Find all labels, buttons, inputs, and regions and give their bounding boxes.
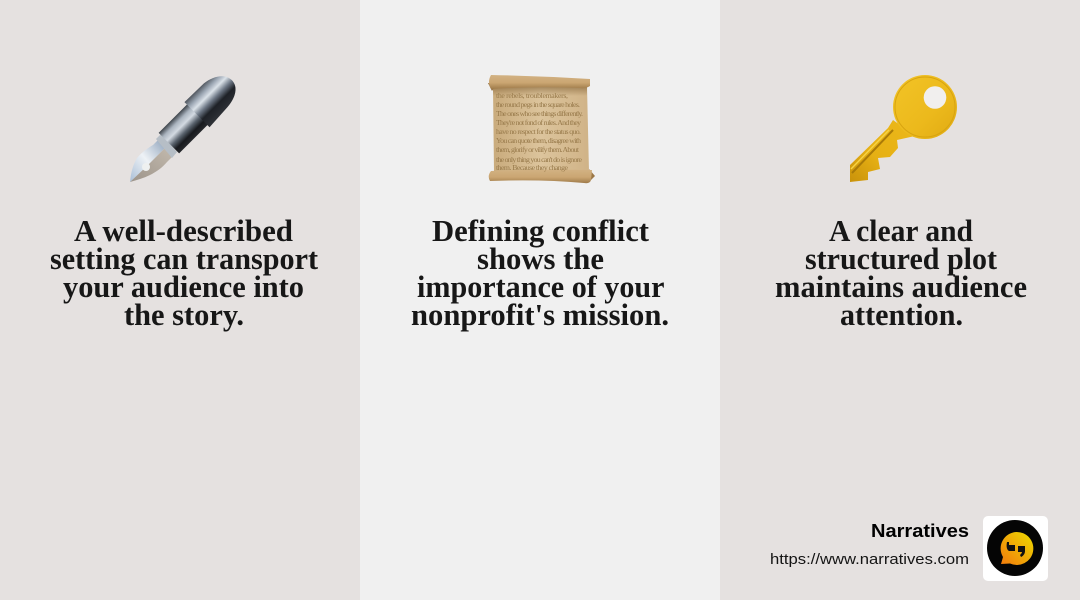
heading: setting: your audience into (63, 269, 304, 304)
icon: parchment scroll: The ones who see things differently. (496, 109, 583, 118)
panel background: conflict (360, 0, 720, 600)
panel: setting (0, 0, 360, 600)
heading: setting: A well-described (74, 213, 293, 248)
icon: parchment scroll: them, glorify or vilify them. About (496, 145, 580, 154)
heading: plot: structured plot (805, 241, 998, 276)
website url: https://www.narratives.com (770, 551, 969, 568)
icon: parchment scroll: have no respect for the status quo. (496, 127, 581, 136)
panel background: setting (0, 0, 360, 600)
heading: conflict: shows the (477, 241, 604, 276)
icon: parchment scroll: the rebels, troublemakers, (496, 91, 568, 100)
icon: parchment scroll: They're not fond of rules. And they (496, 118, 581, 127)
heading: setting: the story. (124, 297, 244, 332)
heading: plot: attention. (840, 297, 963, 332)
panel: plot (720, 0, 1080, 600)
heading: conflict: nonprofit's mission. (411, 297, 669, 332)
icon: parchment scroll: the round pegs in the square holes. (496, 100, 580, 109)
panel background: plot (720, 0, 1080, 600)
icon: parchment scroll (488, 75, 595, 183)
heading: plot: A clear and (829, 213, 973, 248)
heading: conflict: importance of your (417, 269, 665, 304)
icon: parchment scroll: You can quote them, disagree with (496, 136, 581, 145)
icon: fountain pen (130, 67, 244, 182)
icon: golden key (850, 75, 957, 182)
icon: parchment scroll: the only thing you can't do is ignore (496, 155, 583, 164)
heading: conflict: Defining conflict (432, 213, 650, 248)
brand name: Narratives (871, 520, 969, 541)
heading: plot: maintains audience (775, 269, 1027, 304)
logo: speech bubble (983, 516, 1048, 581)
icon: parchment scroll: them. Because they change (496, 163, 569, 172)
panel: conflict (360, 0, 720, 600)
heading: setting: setting can transport (50, 241, 319, 276)
